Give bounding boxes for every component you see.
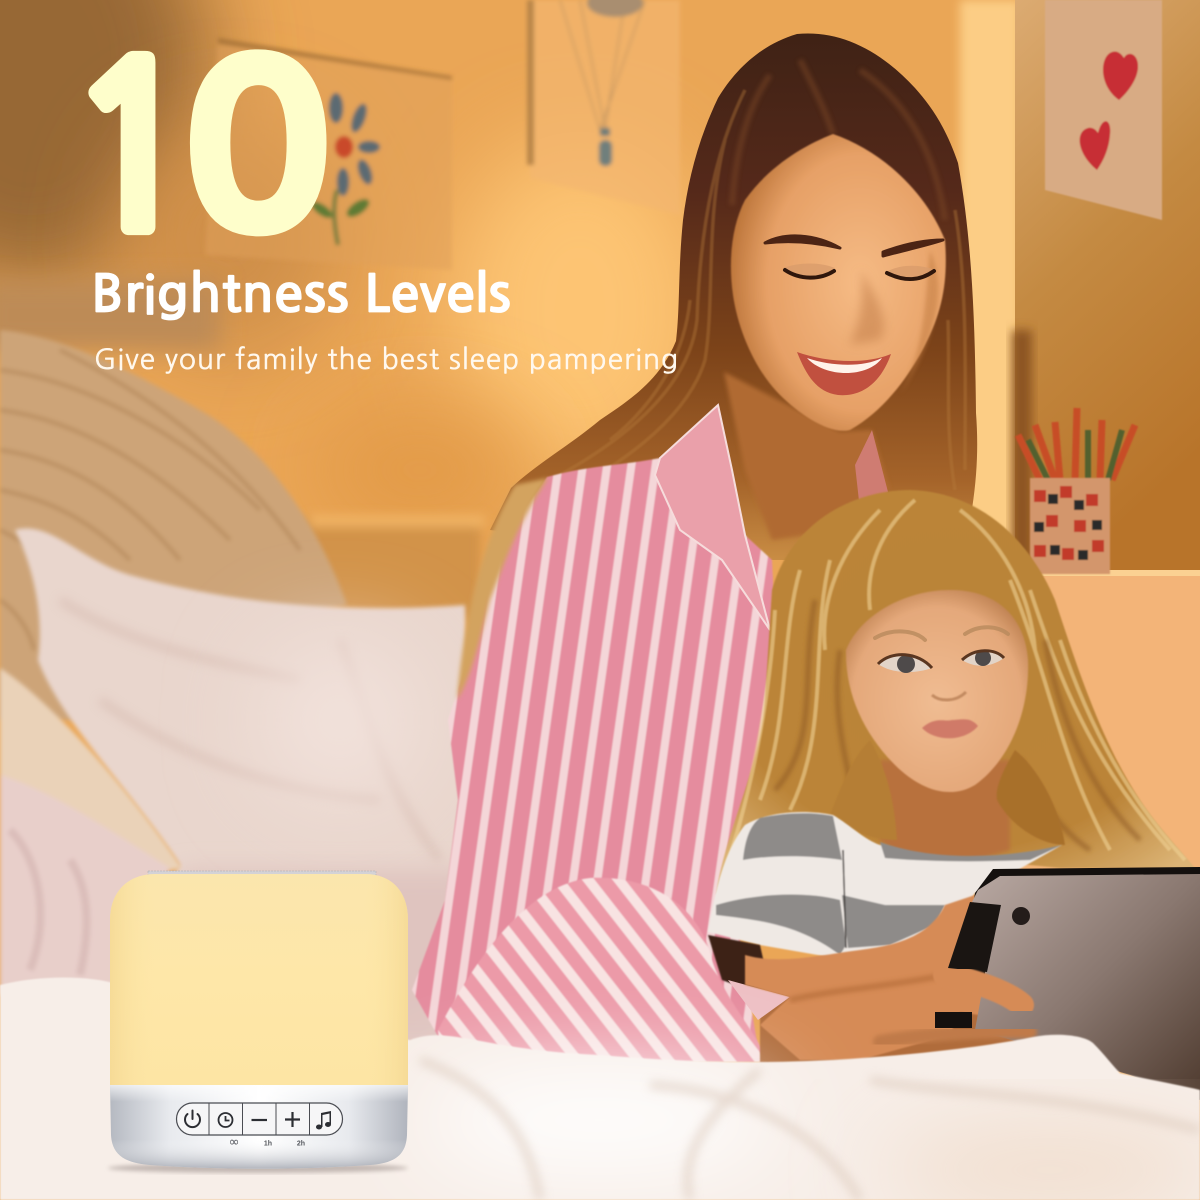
dark gap under sleeve — [708, 935, 770, 990]
heading number 10: 1 — [65, 37, 201, 263]
woman eyebrows — [765, 236, 943, 256]
girl eyes — [878, 650, 1004, 673]
lamp mesh strip — [148, 871, 376, 878]
girl nose — [932, 692, 966, 700]
lamp button panel — [176, 1103, 342, 1135]
woman eyes — [783, 264, 935, 280]
subtitle: Give your family the best sleep pampering — [94, 346, 678, 374]
nose shadow — [850, 270, 884, 345]
lamp base — [110, 1085, 408, 1169]
crochet pillow — [0, 330, 347, 720]
icon: timer — [218, 1113, 232, 1127]
flower drawing — [309, 93, 380, 245]
pajama body — [412, 405, 775, 1060]
girl hair locks over neck — [830, 740, 1065, 845]
girl arm and hand — [745, 895, 1028, 1060]
headboard — [300, 515, 485, 620]
lamp — [108, 871, 408, 1173]
pajama leg — [438, 878, 768, 1062]
hand shadow base — [760, 990, 1040, 1065]
girl neck — [880, 760, 1010, 865]
icon: music note — [316, 1111, 331, 1130]
icon: plus — [285, 1112, 300, 1127]
lower finger — [880, 1032, 1030, 1042]
tablet side panel — [948, 902, 1001, 972]
lower left pillow — [0, 668, 182, 995]
pencil cup — [1018, 408, 1135, 574]
woman neck and chest — [724, 372, 890, 540]
timer labels — [229, 1135, 305, 1150]
face right shadow — [900, 250, 938, 395]
wall poster with hot air balloon — [527, 0, 680, 215]
woman smile — [797, 352, 891, 395]
duvet — [0, 978, 1200, 1200]
fingers on tablet — [945, 975, 1022, 1005]
pajama collar — [655, 405, 770, 630]
right niche and shelf — [960, 0, 1200, 876]
lamp shade — [110, 874, 408, 1085]
lamp shadow — [108, 1163, 408, 1173]
girl hair — [716, 490, 1195, 895]
tablet corner under hand — [935, 1012, 972, 1028]
poster with hearts — [1045, 0, 1162, 220]
heart bottom — [1080, 121, 1110, 170]
pajama — [412, 405, 888, 1062]
hair part highlight — [732, 60, 945, 220]
wall poster with flower — [205, 38, 452, 270]
white pillow — [15, 528, 480, 1050]
girl shirt — [708, 812, 1062, 958]
girl — [708, 490, 1195, 1065]
icon: power — [185, 1110, 200, 1127]
heading: brightness levels: Brightness Levels — [91, 268, 511, 320]
girl eyebrows — [875, 627, 1008, 640]
woman face — [731, 134, 946, 431]
heading number 10: 0 — [182, 37, 333, 263]
icon: minus — [252, 1119, 267, 1121]
pajama collar right — [855, 430, 888, 510]
woman hair — [490, 33, 977, 560]
tablet camera — [1012, 907, 1030, 925]
heading number 10 — [65, 37, 333, 263]
tablet back — [972, 874, 1200, 1100]
timer labels: 1h — [264, 1140, 272, 1148]
timer labels: ∞ — [229, 1135, 239, 1150]
girl lips — [922, 719, 978, 738]
heart top — [1103, 52, 1138, 100]
woman blonde hair on shoulder — [457, 478, 548, 700]
timer labels: 2h — [297, 1140, 305, 1148]
pajama cuff — [728, 980, 790, 1020]
girl face — [846, 590, 1028, 792]
tablet — [880, 867, 1200, 1100]
